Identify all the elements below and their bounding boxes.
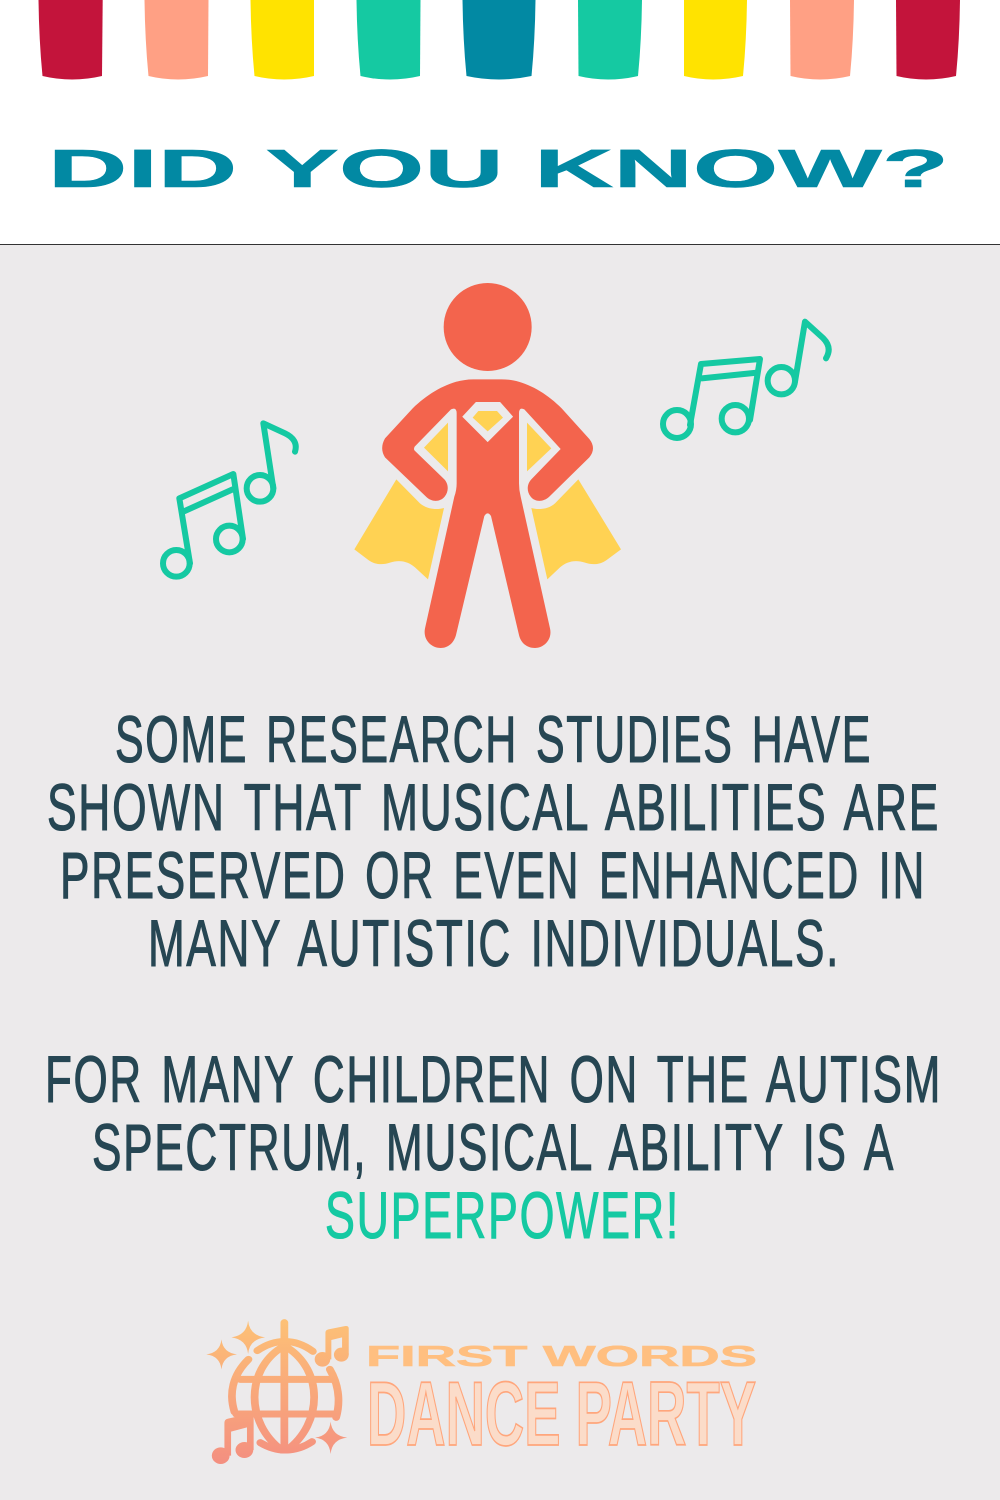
logo text: Dance Party: DANCE PARTY bbox=[367, 1364, 756, 1465]
title: DID YOU KNOW? bbox=[48, 139, 949, 199]
coloured bars along the top bbox=[38, 0, 960, 80]
text block: superpower statement bbox=[45, 1042, 942, 1252]
logo: First Words Dance Party bbox=[206, 1321, 757, 1465]
icon: superhero with cape bbox=[354, 283, 621, 648]
icon: music notes right bbox=[663, 322, 829, 438]
text block: research statement bbox=[47, 702, 940, 980]
text block: superpower statement: SUPERPOWER! bbox=[325, 1178, 680, 1252]
icon: music notes left bbox=[163, 423, 296, 577]
logo text: First Words: FIRST WORDS bbox=[366, 1341, 757, 1373]
icon: disco ball with stars and notes bbox=[206, 1321, 349, 1464]
